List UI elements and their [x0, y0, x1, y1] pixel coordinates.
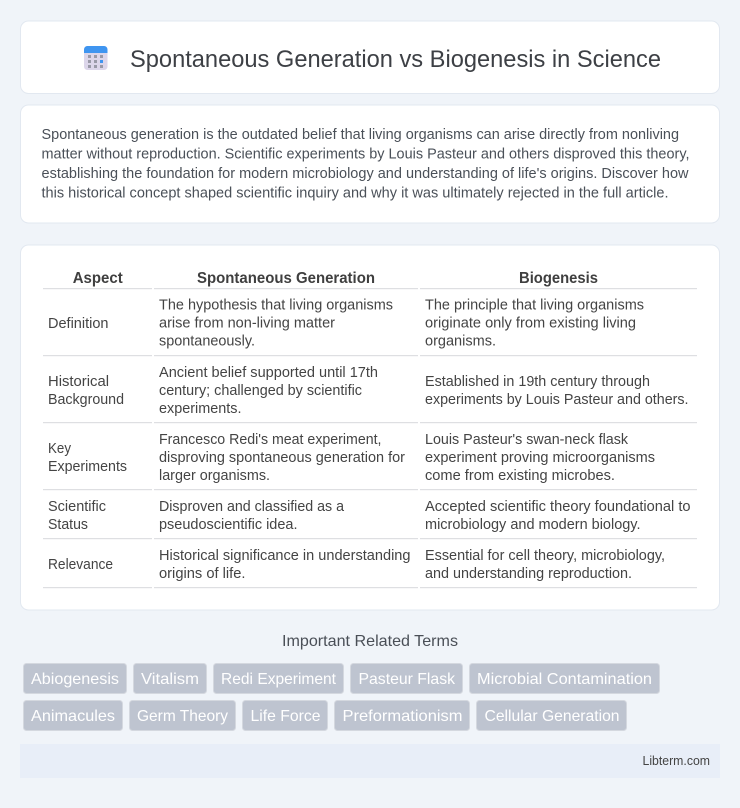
- row: scientific status: microbiology and modern biology.: [425, 517, 640, 533]
- related term tags: [24, 664, 660, 730]
- related term tags: Pasteur Flask: [358, 671, 456, 688]
- row: key experiments: [48, 432, 655, 484]
- row: key experiments: Francesco Redi's meat experiment,: [159, 432, 382, 448]
- icon: calendar: [84, 46, 108, 70]
- row: relevance: origins of life.: [159, 566, 246, 582]
- panel: comparison table: [20, 245, 720, 610]
- title: Spontaneous Generation vs Biogenesis in Science: [130, 46, 661, 73]
- row: definition: Definition: [48, 316, 108, 332]
- row: key experiments: Key: [48, 441, 72, 457]
- row: key experiments: experiment proving microorganisms: [425, 450, 655, 466]
- related term tags: Animacules: [31, 708, 115, 725]
- row: historical background: Background: [48, 392, 124, 408]
- row: definition: spontaneously.: [159, 334, 255, 350]
- table header row: Spontaneous Generation: [197, 270, 375, 287]
- row: relevance: and understanding reproduction.: [425, 566, 632, 582]
- table header row: Biogenesis: [519, 270, 598, 287]
- table header row: Aspect: [73, 270, 123, 287]
- row: scientific status: [48, 499, 690, 533]
- row: definition: organisms.: [425, 334, 496, 350]
- row: key experiments: larger organisms.: [159, 468, 270, 484]
- row: definition: The hypothesis that living organisms: [159, 298, 393, 314]
- row: scientific status: Accepted scientific theory foundational to: [425, 499, 690, 515]
- row: definition: originate only from existing living: [425, 316, 636, 332]
- row: scientific status: pseudoscientific idea.: [159, 517, 298, 533]
- footer: [20, 744, 720, 778]
- row: historical background: Ancient belief supported until 17th: [159, 365, 378, 381]
- row: historical background: experiments by Louis Pasteur and others.: [425, 392, 688, 408]
- panel: introduction: [20, 105, 720, 223]
- row: historical background: [48, 365, 688, 417]
- row: scientific status: Disproven and classified as a: [159, 499, 344, 515]
- row: key experiments: disproving spontaneous generation for: [159, 450, 405, 466]
- row: definition: The principle that living organisms: [425, 298, 644, 314]
- intro text: Spontaneous generation is the outdated belief that living organisms can arise directly from nonliving: [42, 127, 679, 143]
- row: historical background: Historical: [48, 374, 109, 390]
- table header row: [73, 270, 598, 287]
- intro text: [42, 127, 690, 202]
- row: relevance: Historical significance in understanding: [159, 548, 410, 564]
- row: key experiments: Louis Pasteur's swan-neck flask: [425, 432, 629, 448]
- row: definition: [48, 298, 644, 350]
- intro text: matter without reproduction. Scientific experiments by Louis Pasteur and others disproved this theory,: [42, 146, 690, 162]
- row: relevance: Essential for cell theory, microbiology,: [425, 548, 665, 564]
- row: historical background: Established in 19th century through: [425, 374, 650, 390]
- panel: header: [20, 21, 720, 94]
- related term tags: Abiogenesis: [31, 671, 119, 688]
- intro text: this historical concept shaped scientific inquiry and why it was ultimately rejected in the full article.: [42, 186, 668, 202]
- row: definition: arise from non-living matter: [159, 316, 335, 332]
- intro text: establishing the foundation for modern microbiology and understanding of life's origins. Discover how: [42, 166, 689, 182]
- related term tags: Cellular Generation: [484, 708, 620, 725]
- row: historical background: experiments.: [159, 401, 242, 417]
- related term tags: Life Force: [250, 708, 321, 725]
- related term tags: Preformationism: [342, 708, 462, 725]
- row: key experiments: come from existing microbes.: [425, 468, 615, 484]
- row: relevance: Relevance: [48, 557, 113, 573]
- related term tags: Germ Theory: [137, 708, 228, 725]
- row: relevance: [48, 548, 665, 582]
- related term tags: Vitalism: [141, 671, 199, 688]
- row: scientific status: Status: [48, 517, 88, 533]
- related term tags: Microbial Contamination: [477, 671, 652, 688]
- heading: important related terms: Important Related Terms: [282, 633, 458, 650]
- footer: Libterm.com: [642, 754, 710, 768]
- row: scientific status: Scientific: [48, 499, 106, 515]
- related term tags: Redi Experiment: [221, 671, 337, 688]
- row: historical background: century; challenged by scientific: [159, 383, 362, 399]
- row: key experiments: Experiments: [48, 459, 127, 475]
